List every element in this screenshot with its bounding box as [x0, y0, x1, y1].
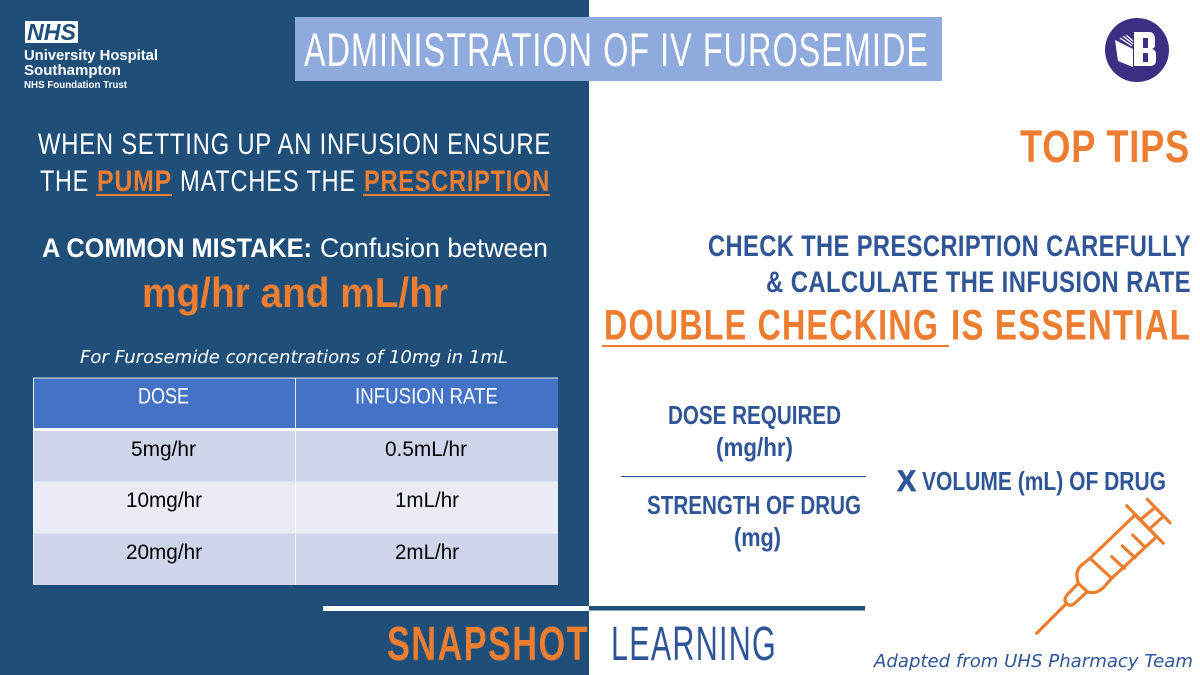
logo: NHS University Hospital Southampton: NHS Foundation Trust [24, 80, 128, 91]
text: common mistake [42, 233, 548, 263]
table: dose and infusion rate: 1mL/hr [395, 489, 459, 512]
credit: adapted from UHS Pharmacy Team: Adapted from UHS Pharmacy Team [873, 651, 1193, 672]
formula: dose over strength: STRENGTH OF DRUG [647, 490, 861, 520]
logo: NHS University Hospital Southampton: University Hospital [24, 47, 158, 64]
divider: footer rule [323, 606, 865, 611]
table: dose and infusion rate [33, 378, 558, 585]
logo: NHS University Hospital Southampton: NHS [27, 19, 77, 45]
text: check the prescription [708, 230, 1191, 299]
table: dose and infusion rate: 20mg/hr [126, 541, 202, 564]
formula: dose over strength: (mg/hr) [716, 432, 793, 462]
text: common mistake: A COMMON MISTAKE: [42, 233, 312, 263]
formula: dose over strength: DOSE REQUIRED [668, 400, 841, 430]
table: dose and infusion rate: 5mg/hr [131, 438, 196, 461]
icon: syringe [1037, 499, 1170, 633]
table: dose and infusion rate: 0.5mL/hr [385, 438, 467, 461]
heading: pump matches prescription [38, 128, 551, 198]
text: concentration note: For Furosemide concentrations of 10mg in 1mL [80, 347, 508, 368]
footer: snapshot learning: SNAPSHOT [387, 618, 589, 671]
text: common mistake: Confusion between [320, 233, 548, 263]
table: dose and infusion rate: DOSE [138, 384, 189, 408]
formula: times volume of drug: X [897, 465, 916, 498]
heading: pump matches prescription: WHEN SETTING UP AN INFUSION ENSURE [38, 128, 551, 161]
table: dose and infusion rate: INFUSION RATE [355, 384, 498, 408]
logo: NHS University Hospital Southampton: Southampton [24, 62, 121, 79]
heading: pump matches prescription: MATCHES THE [180, 165, 356, 198]
title: ADMINISTRATION OF IV FUROSEMIDE [304, 23, 929, 76]
formula: dose over strength [621, 400, 866, 552]
callout: mg/hr and mL/hr: mg/hr and mL/hr [142, 269, 448, 316]
icon: book B logo [1105, 18, 1169, 82]
heading: pump matches prescription: THE [40, 165, 89, 198]
logo: NHS University Hospital Southampton [24, 19, 158, 91]
formula: dose over strength: (mg) [734, 522, 781, 552]
footer: snapshot learning: LEARNING [611, 618, 777, 671]
title [295, 17, 942, 81]
table: dose and infusion rate: 2mL/hr [395, 541, 459, 564]
heading: pump matches prescription: PRESCRIPTION [364, 165, 550, 198]
panel: left background [0, 0, 589, 675]
callout: double checking is essential: DOUBLE CHECKING [604, 302, 939, 350]
table: dose and infusion rate: 10mg/hr [126, 489, 202, 512]
heading: pump matches prescription: PUMP [97, 165, 172, 198]
